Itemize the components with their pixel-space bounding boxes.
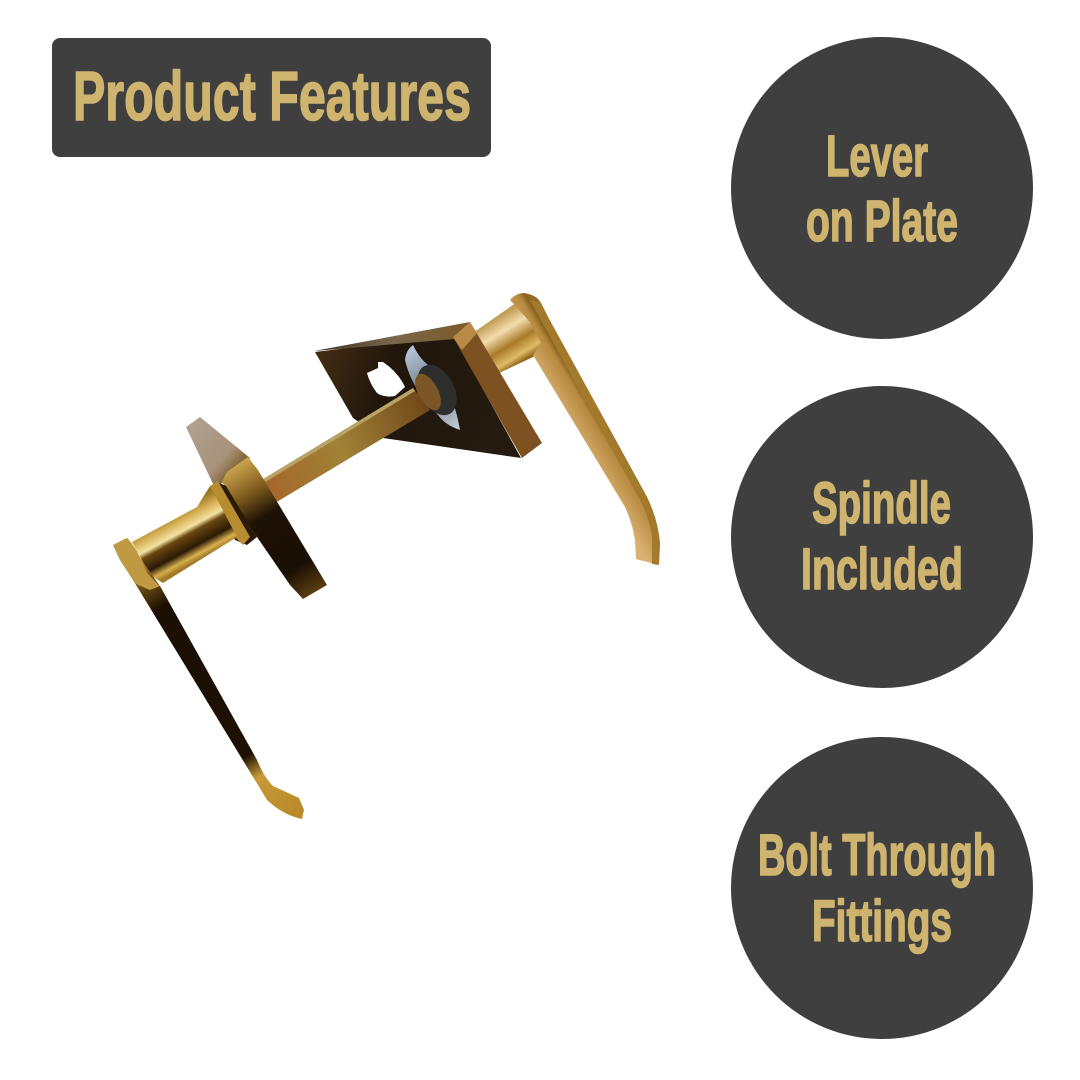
far neck [470,300,545,375]
near lever [113,538,304,819]
title banner [52,38,491,157]
spindle [255,388,430,506]
feature label: lever on plate: on Plate [806,189,958,254]
feature label: bolt through fittings: Fittings [812,889,952,954]
feature label: spindle included: Included [801,537,963,602]
title text: Product Features [73,57,471,135]
near plate [186,417,327,599]
product illustration: brass lever handle set [113,293,660,819]
near neck [132,481,257,583]
feature circle: bolt through fittings [731,737,1033,1039]
far backplate [314,322,542,458]
feature label: lever on plate: Lever [826,124,928,189]
feature circle: lever on plate [731,37,1033,339]
far lever [510,293,660,565]
feature label: spindle included: Spindle [812,471,951,536]
feature circle: spindle included [731,386,1033,688]
spindle washer and nut [405,345,465,430]
